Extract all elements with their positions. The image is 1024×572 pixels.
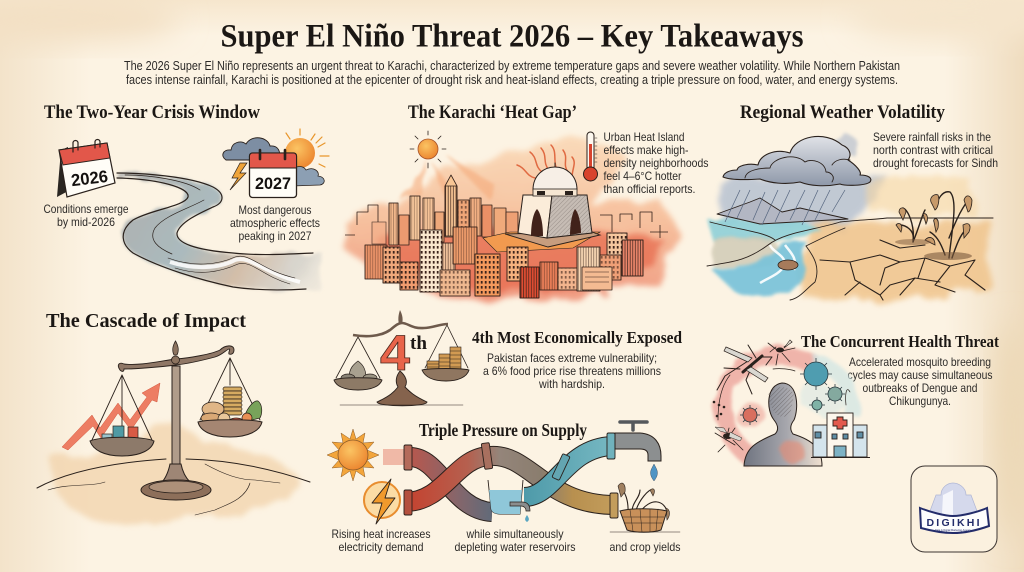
small scale with large 4th: th [410,333,427,354]
caption: most dangerous effects: atmospheric effects [230,216,320,230]
rock in river [778,260,798,270]
captions: supply: while simultaneously [466,527,564,541]
small scale with large 4th [334,310,469,406]
panel: triple pressure on supply [327,420,680,554]
text: urban heat island: density neighborhoods [604,156,708,170]
icon: hospital [811,413,870,458]
captions: supply: and crop yields [610,540,680,554]
heat squiggles [517,145,574,178]
bar chart on left pan [102,426,138,444]
logo: digikhi [911,466,997,552]
red and blue watercolor arcs [718,355,852,458]
post and base [172,366,180,464]
heading: two-year crisis window: The Two-Year Crisis Window [44,102,260,123]
text: urban heat island: effects make high- [604,143,689,157]
text: urban heat island: Urban Heat Island [604,130,684,144]
heading: concurrent health threat: The Concurrent Health Threat [801,332,999,351]
illustration: mausoleum plaza [483,232,600,252]
icon: 2027 calendar [250,150,296,198]
balance scale [90,341,262,500]
storm cloud [723,133,871,186]
panel: the two-year crisis window [44,102,329,291]
heading: 4th most exposed: 4th Most Economically Exposed [472,328,682,347]
skyline buildings [345,175,668,296]
withered plants [895,192,972,260]
captions: supply: depleting water reservoirs [454,540,576,554]
mountains [717,198,848,224]
caption: most dangerous effects: Most dangerous [238,203,312,217]
text: severe rainfall: north contrast with critical [873,143,993,157]
heading: cascade of impact: The Cascade of Impact [46,310,246,332]
cracked earth [820,218,993,300]
caption: conditions emerge [44,202,129,229]
caption: most dangerous effects [230,203,320,243]
coins and food on right pan [201,387,262,425]
rising arrow [62,383,160,450]
title: Super El Niño Threat 2026 – Key Takeaways [220,18,804,54]
panel: 4th most economically exposed [334,310,682,406]
text: urban heat island: than official reports. [604,182,696,196]
text: severe rainfall: drought forecasts for Sindh [873,156,998,170]
caption: most dangerous effects: peaking in 2027 [238,229,312,243]
foreground buildings [475,233,643,298]
watercolor heat haze [345,138,686,301]
intertwined pipes [383,433,618,518]
rain lines [725,190,845,225]
river banks [707,218,887,300]
text: mosquito breeding [848,355,992,408]
icon: basket with wilted crop [610,483,680,532]
text: mosquito breeding: cycles may cause simultaneous [848,368,992,382]
captions: supply [332,527,680,554]
caption: conditions emerge: Conditions emerge [44,202,129,216]
right pan [198,420,262,437]
intro paragraph: faces intense rainfall, Karachi is positioned at the epicenter of drought risk and heat-island effects, creating a triple pressure on food, water, and energy systems. [126,72,898,87]
panel: the concurrent health threat [713,332,999,466]
left pan [90,437,154,456]
text: mosquito breeding: outbreaks of Dengue and [862,381,978,395]
text: pakistan vulnerability: a 6% food price rise threatens millions [483,364,661,378]
winding road illustration [117,173,322,291]
caption: conditions emerge: by mid-2026 [57,215,115,229]
captions: supply: Rising heat increases [332,527,430,541]
coins on right pan [427,347,461,371]
panel: the karachi heat gap [345,102,708,301]
icon: faucet with drop [615,422,661,481]
heading: regional weather volatility: Regional Weather Volatility [740,102,945,123]
icon: sun [327,429,379,481]
intro paragraph [124,58,900,87]
small scale with large 4th: 4 [380,325,410,381]
water glass with tap [488,480,530,522]
heading: karachi heat gap: The Karachi ‘Heat Gap’ [408,102,577,123]
text: pakistan vulnerability [483,351,661,391]
money bags on left pan [341,361,377,382]
captions: supply: electricity demand [338,540,424,554]
text: mosquito breeding: Accelerated mosquito breeding [849,355,991,369]
text: urban heat island: feel 4–6°C hotter [604,169,682,183]
icon: 2026 calendar: 2026 [70,167,109,190]
watercolor ground [37,422,310,523]
text: severe rainfall [873,130,998,170]
icon: 2026 calendar [57,140,115,197]
icon: thermometer [584,132,598,181]
beam [118,346,234,371]
text: pakistan vulnerability: Pakistan faces extreme vulnerability; [487,351,657,365]
person silhouette [744,383,822,466]
text: mosquito breeding: Chikungunya. [889,394,951,408]
logo: digikhi: Data & Digital Marketing Agency [935,528,972,532]
illustration: mazar-e-quaid mausoleum [505,163,600,247]
heading: triple pressure: Triple Pressure on Supply [419,420,587,440]
panel: regional weather volatility [707,102,998,300]
text: severe rainfall: Severe rainfall risks in the [873,130,991,144]
icon: sun [410,131,446,168]
icon: viruses [740,358,845,425]
panel: the cascade of impact [37,310,310,523]
icon: mosquitoes [713,340,795,452]
watercolor landscape [708,175,990,300]
text: pakistan vulnerability: with hardship. [538,377,605,391]
text: urban heat island [604,130,708,196]
logo: digikhi: DIGIKHI [926,517,980,529]
icon: 2027 calendar: 2027 [255,174,291,193]
icon: sun, storm clouds and lightning [223,129,329,190]
icon: electricity bolt [364,479,400,524]
